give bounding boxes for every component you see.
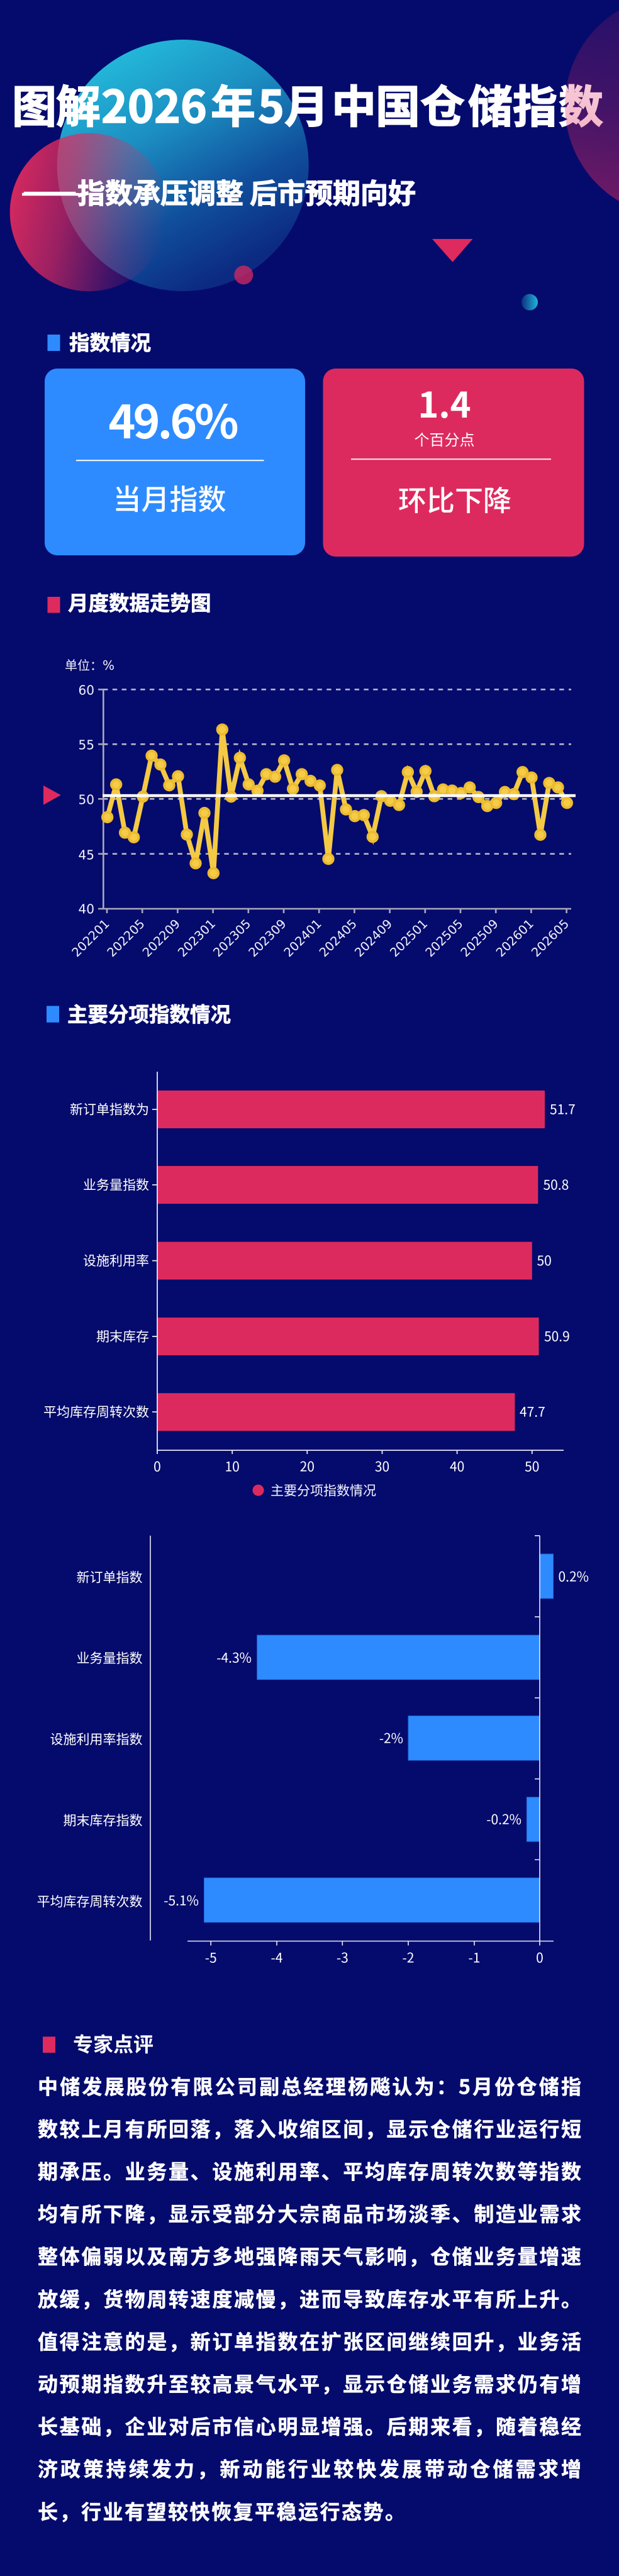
category labels: 期末库存指数 bbox=[63, 1811, 142, 1829]
value labels: 47.7 bbox=[520, 1402, 545, 1421]
x axis labels: 202401 bbox=[281, 916, 325, 960]
x axis labels: 202601 bbox=[493, 916, 537, 960]
category labels: 平均库存周转次数 bbox=[36, 1892, 142, 1911]
category labels: 期末库存 bbox=[96, 1327, 149, 1346]
x axis labels: 202309 bbox=[246, 916, 289, 960]
value labels: 50.9 bbox=[544, 1327, 570, 1346]
category labels: 设施利用率指数 bbox=[50, 1729, 142, 1748]
bars bbox=[204, 1554, 554, 1923]
bar chart: month-on-month change of sub-indices bbox=[36, 1536, 589, 1967]
header decoration: small teal dot bbox=[521, 294, 538, 311]
line chart: monthly index trend bbox=[43, 658, 576, 960]
value labels: 0.2% bbox=[559, 1567, 589, 1586]
text block: expert commentary: 中储发展股份有限公司副总经理杨飚认为：5月份仓储指 bbox=[38, 2071, 581, 2100]
subtitle: ——指数承压调整 后市预期向好 bbox=[22, 171, 416, 211]
text block: expert commentary bbox=[38, 2071, 581, 2525]
text block: expert commentary: 期承压。业务量、设施利用率、平均库存周转次数等指数 bbox=[38, 2156, 581, 2185]
title: 图解2026年5月中国仓储指数 bbox=[12, 72, 603, 136]
value labels: 50.8 bbox=[544, 1175, 569, 1194]
value labels: -0.2% bbox=[486, 1810, 521, 1829]
x axis labels: 202305 bbox=[210, 916, 254, 960]
x axis labels: 202505 bbox=[423, 916, 466, 960]
value labels: 50 bbox=[537, 1251, 552, 1270]
value labels bbox=[520, 1099, 576, 1421]
x axis labels: -3 bbox=[337, 1948, 349, 1967]
y axis labels: 45 bbox=[79, 848, 94, 863]
category labels: 业务量指数 bbox=[77, 1648, 142, 1667]
x axis labels: 10 bbox=[225, 1457, 240, 1475]
value labels: -2% bbox=[379, 1728, 403, 1747]
value labels: -5.1% bbox=[164, 1890, 199, 1909]
x axis labels: 202405 bbox=[316, 916, 360, 960]
text block: expert commentary: 数较上月有所回落，落入收缩区间，显示仓储行业运行短 bbox=[38, 2114, 581, 2143]
white reference line bbox=[103, 794, 576, 797]
x axis labels: 202201 bbox=[69, 916, 113, 960]
text block: expert commentary: 动预期指数升至较高景气水平，显示仓储业务需求仍有增 bbox=[38, 2368, 581, 2397]
text block: expert commentary: 均有所下降，显示受部分大宗商品市场淡季、制造业需求 bbox=[38, 2199, 581, 2228]
category labels bbox=[36, 1567, 142, 1911]
x axis labels: 0 bbox=[153, 1457, 161, 1475]
header decoration: blue gradient circle bbox=[57, 40, 309, 291]
text block: expert commentary: 值得注意的是，新订单指数在扩张区间继续回升，业务活 bbox=[38, 2326, 581, 2355]
axes and ticks bbox=[98, 689, 571, 913]
y axis labels: 60 bbox=[79, 683, 94, 698]
y axis labels: 50 bbox=[79, 792, 94, 808]
section heading: monthly trend: 月度数据走势图 bbox=[68, 587, 211, 616]
header decoration: red down triangle bbox=[432, 239, 472, 262]
x axis labels bbox=[205, 1948, 544, 1967]
axes and ticks bbox=[150, 1536, 554, 1946]
x axis labels bbox=[69, 916, 572, 960]
value: 1.4: 1.4 bbox=[418, 377, 471, 428]
x axis labels: 202605 bbox=[528, 916, 572, 960]
red marker triangle bbox=[43, 786, 61, 805]
x axis labels: -1 bbox=[469, 1948, 480, 1967]
x axis labels: 202209 bbox=[140, 916, 183, 960]
value labels: -4.3% bbox=[216, 1648, 252, 1667]
category labels: 平均库存周转次数 bbox=[43, 1402, 149, 1421]
unit label: 单位：% bbox=[65, 658, 114, 673]
category labels: 新订单指数 bbox=[77, 1567, 142, 1586]
section heading: expert commentary: 专家点评 bbox=[73, 2029, 153, 2058]
category labels bbox=[43, 1099, 149, 1421]
bars bbox=[157, 1091, 545, 1431]
x axis labels: 202509 bbox=[458, 916, 501, 960]
bar chart: main sub-indices bbox=[43, 1072, 576, 1499]
header decoration: red gradient circle bbox=[10, 133, 168, 291]
x axis labels: -5 bbox=[205, 1948, 217, 1967]
text block: expert commentary: 济政策持续发力，新动能行业较快发展带动仓储需求增 bbox=[38, 2454, 581, 2483]
panel: current month index bbox=[45, 369, 305, 555]
x axis labels: 202409 bbox=[352, 916, 395, 960]
x axis labels: 30 bbox=[375, 1457, 389, 1475]
value labels: 51.7 bbox=[550, 1099, 576, 1118]
x axis labels: 40 bbox=[450, 1457, 464, 1475]
y axis labels: 55 bbox=[79, 737, 94, 752]
x axis labels: -4 bbox=[271, 1948, 282, 1967]
horizontal dashed grid lines bbox=[103, 689, 571, 854]
label: current month index: 当月指数 bbox=[113, 477, 226, 518]
panel: month-on-month decline bbox=[323, 369, 584, 557]
category labels: 设施利用率 bbox=[83, 1251, 149, 1270]
value labels bbox=[164, 1567, 589, 1909]
section heading: main sub-indices: 主要分项指数情况 bbox=[67, 999, 231, 1028]
text block: expert commentary: 整体偏弱以及南方多地强降雨天气影响，仓储业务量增速 bbox=[38, 2241, 581, 2270]
x axis labels: 20 bbox=[300, 1457, 315, 1475]
header decoration: purple circle over the title bbox=[565, 0, 619, 217]
y axis labels bbox=[79, 683, 94, 917]
text block: expert commentary: 放缓，货物周转速度减慢，进而导致库存水平有所上升。 bbox=[38, 2284, 581, 2312]
x axis labels: 202205 bbox=[104, 916, 148, 960]
unit: percentage points: 个百分点 bbox=[414, 428, 474, 450]
text block: expert commentary: 长，行业有望较快恢复平稳运行态势。 bbox=[38, 2496, 407, 2525]
value: 49.6%: 49.6% bbox=[108, 386, 237, 452]
legend: 主要分项指数情况 bbox=[270, 1480, 376, 1499]
category labels: 业务量指数 bbox=[83, 1175, 149, 1194]
x axis labels: 202501 bbox=[387, 916, 430, 960]
axes and ticks bbox=[152, 1072, 564, 1454]
label: month-on-month decline: 环比下降 bbox=[398, 478, 511, 519]
x axis labels bbox=[153, 1457, 539, 1475]
y axis labels: 40 bbox=[79, 902, 94, 917]
section heading: index overview: 指数情况 bbox=[69, 327, 151, 356]
category labels: 新订单指数为 bbox=[70, 1099, 149, 1118]
x axis labels: 0 bbox=[536, 1948, 544, 1967]
yellow index line with markers bbox=[103, 724, 572, 878]
header decoration: small red dot bbox=[234, 265, 253, 284]
x axis labels: -2 bbox=[403, 1948, 414, 1967]
x axis labels: 202301 bbox=[175, 916, 218, 960]
x axis labels: 50 bbox=[525, 1457, 539, 1475]
text block: expert commentary: 长基础，企业对后市信心明显增强。后期来看，随着稳经 bbox=[38, 2411, 581, 2440]
